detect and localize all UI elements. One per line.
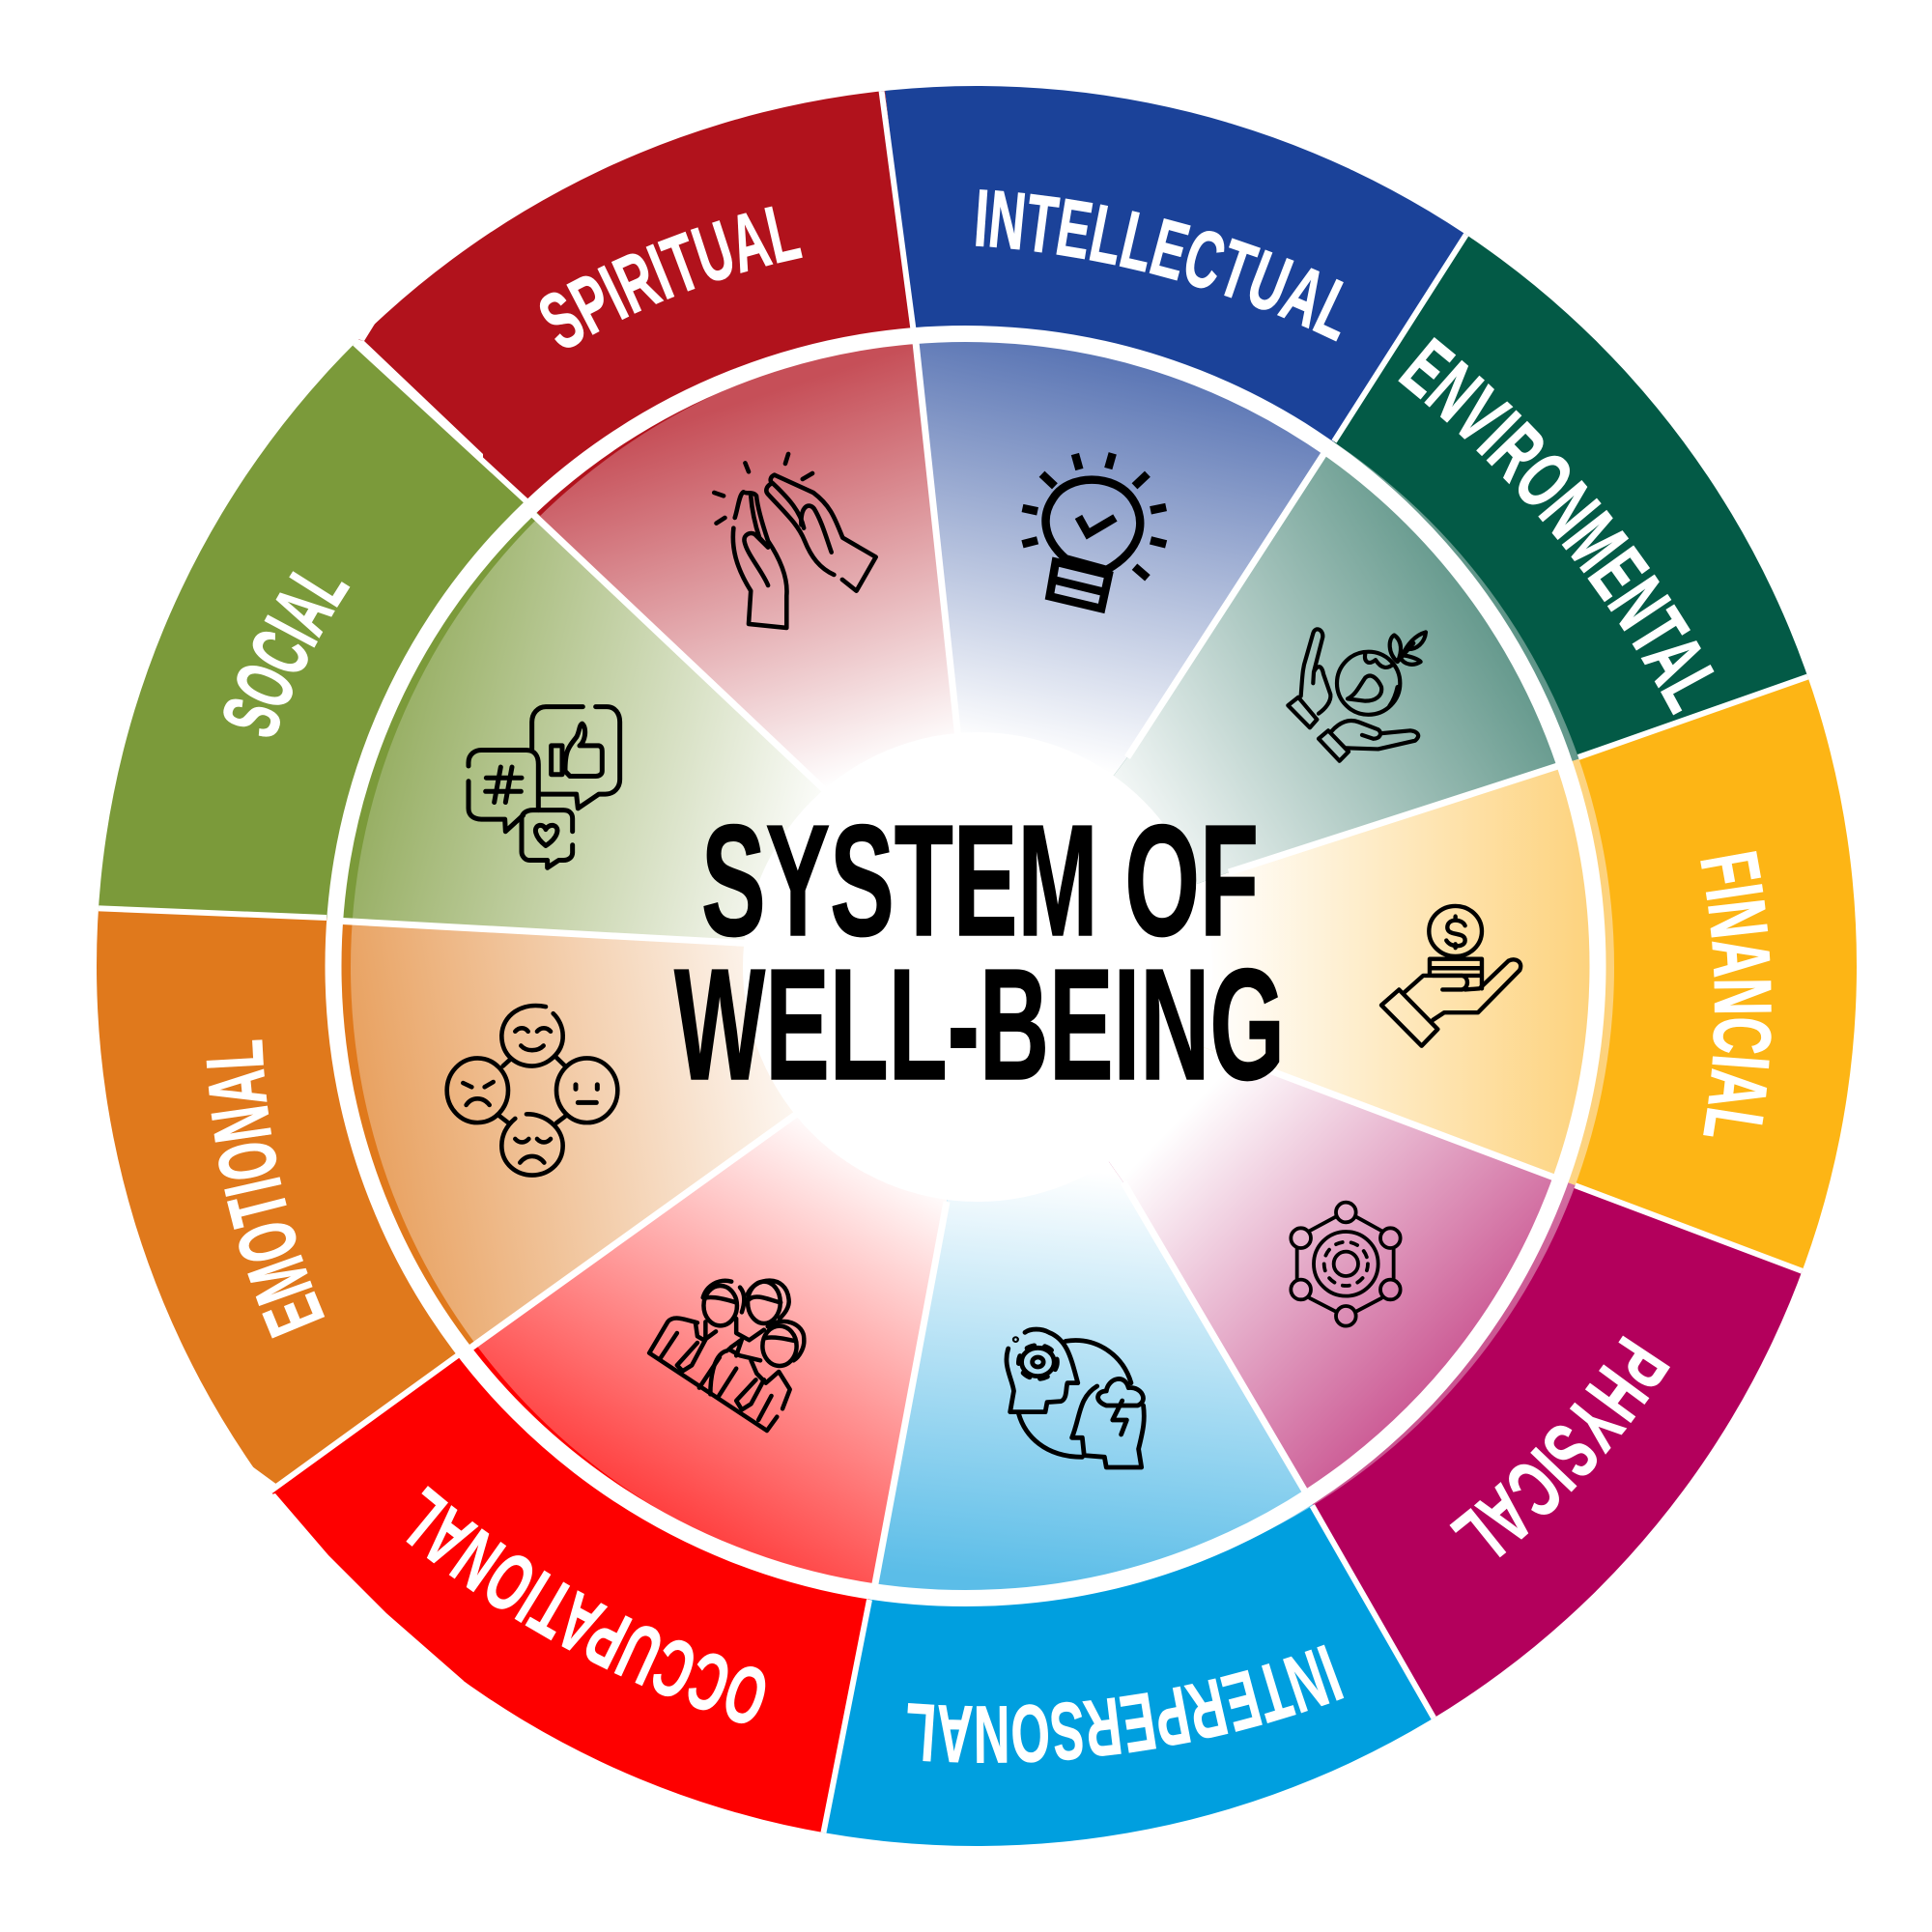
segment: social xyxy=(99,344,540,919)
icon: team of three people xyxy=(649,1281,804,1431)
segment: financial xyxy=(1204,676,1857,1271)
icon: hands holding globe xyxy=(1288,629,1426,761)
wedge: emotional xyxy=(351,925,794,1342)
icon: social media speech bubbles xyxy=(469,707,620,867)
label: environmental: ENVIRONMENTAL xyxy=(1398,337,1714,715)
wedge: physical xyxy=(1109,1047,1576,1505)
icon: four emotion faces xyxy=(447,1006,617,1176)
wedge: intellectual xyxy=(920,342,1332,776)
label: physical: PHYSICAL xyxy=(1449,1335,1670,1557)
segment: environmental xyxy=(1113,234,1808,884)
label: spiritual: SPIRITUAL xyxy=(539,207,803,348)
icon: light bulb with check mark xyxy=(1022,453,1166,609)
wedge: interpersonal xyxy=(879,1161,1314,1590)
segment: interpersonal xyxy=(823,1200,1434,1846)
segment: emotional xyxy=(97,909,473,1484)
title line 1: SYSTEM OF xyxy=(701,792,1259,969)
icon: two heads with gear and storm xyxy=(1007,1329,1144,1467)
label: interpersonal: INTERPERSONAL xyxy=(907,1644,1345,1763)
label: occupational: OCCUPATIONAL xyxy=(406,1486,765,1723)
segment: intellectual xyxy=(885,86,1466,442)
wedge: spiritual xyxy=(539,344,954,787)
wedge: social xyxy=(353,521,821,940)
icon: hand holding coins xyxy=(1381,906,1520,1046)
label: financial: FINANCIAL xyxy=(1700,851,1772,1136)
segment: spiritual xyxy=(358,91,910,516)
wedge: financial xyxy=(1197,759,1614,1185)
segment: physical xyxy=(1109,1161,1803,1718)
segment: occupational xyxy=(270,1347,869,1833)
label: emotional: EMOTIONAL xyxy=(207,1039,325,1339)
white centre circle xyxy=(743,732,1212,1202)
title xyxy=(674,792,1285,1113)
title line 2: WELL-BEING xyxy=(674,936,1285,1113)
inner disc of gradient wedges xyxy=(351,342,1614,1590)
wedge: occupational xyxy=(477,1117,947,1583)
label: social: SOCIAL xyxy=(223,571,350,737)
label: intellectual: INTELLECTUAL xyxy=(976,189,1344,342)
wedge: environmental xyxy=(1113,440,1578,884)
icon: clapping hands xyxy=(714,454,876,628)
icon: network hexagon xyxy=(1291,1203,1401,1326)
